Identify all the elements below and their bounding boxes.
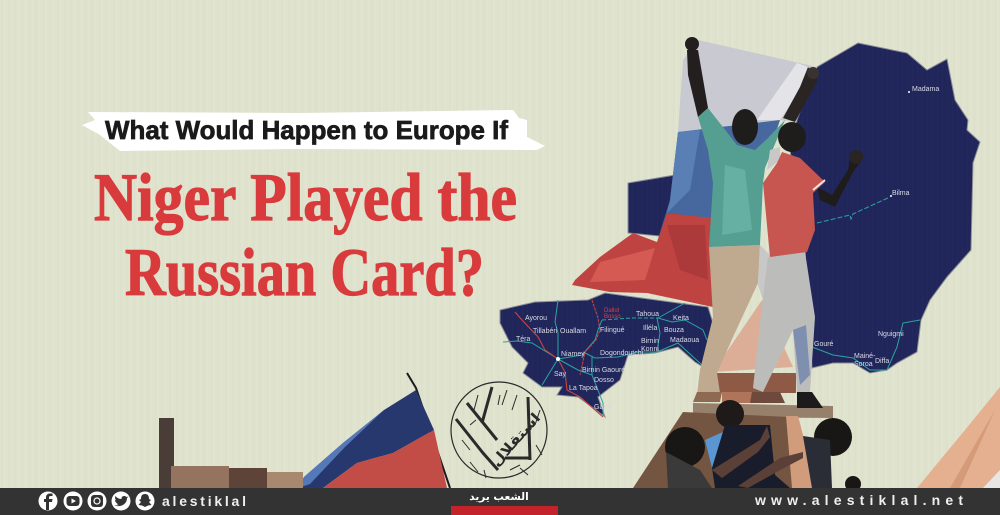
- flag: blue band: [657, 120, 780, 242]
- title: [94, 159, 517, 310]
- title: Russian Card?: [125, 234, 484, 310]
- white brush stroke behind subtitle: [82, 110, 545, 151]
- subtitle: What Would Happen to Europe If: [105, 115, 508, 145]
- flag: red band: [572, 213, 713, 307]
- map: place labels: Dogondoutchi: [600, 350, 644, 357]
- crowd: person left: [665, 427, 705, 467]
- map: western Niger: [500, 293, 713, 417]
- man: head: [732, 109, 758, 145]
- bottom flag: blue band: [298, 390, 434, 488]
- man: shoe: [693, 392, 722, 402]
- man: pale gaps between the men: [758, 147, 780, 300]
- map: place labels: Gouré: [814, 341, 834, 348]
- map: place labels: Nguigmi: [878, 331, 904, 338]
- icon: facebook: [38, 492, 58, 510]
- pyramid: lower stone: [633, 412, 800, 488]
- map: place labels: Birnin Gaouré: [582, 367, 625, 374]
- peach flag at right edge: [917, 387, 1000, 488]
- man: head: [778, 122, 806, 152]
- man in teal shirt: [685, 37, 819, 402]
- man: shoes: [797, 392, 823, 408]
- man in red shirt: [750, 122, 863, 408]
- man: raised arms: [687, 50, 708, 117]
- footer bar: [0, 488, 1000, 515]
- man: shirt: [698, 108, 785, 247]
- map: roads: [503, 197, 920, 417]
- tricolour flag at bottom: [298, 373, 450, 488]
- map: place labels: Bosso: [604, 314, 621, 320]
- man: arm and fist: [817, 157, 862, 207]
- footer: red block: [451, 506, 558, 515]
- map: place labels: Say: [554, 371, 567, 378]
- logo: Alestiklal calligraphic seal: [451, 382, 547, 478]
- bottom flag: pole: [407, 373, 450, 488]
- map: place labels: Gaya: [594, 404, 611, 411]
- logo: calligraphy: استقلال: [487, 410, 544, 470]
- map: place labels: Soroa: [854, 361, 873, 368]
- pyramid: brick base: [716, 373, 796, 393]
- map: place labels: Konni: [641, 346, 659, 353]
- man: grey trousers: [753, 252, 815, 392]
- bottom flag: red band: [323, 430, 447, 488]
- map of Niger: [500, 43, 980, 417]
- map: place labels: Diffa: [875, 358, 889, 365]
- map: place labels: Dosso: [594, 377, 614, 384]
- map: place labels: Filingué: [600, 327, 625, 334]
- icon: snapchat: [136, 492, 154, 510]
- crowd: person right: [814, 418, 852, 456]
- footer: handle: alestiklal: [162, 493, 246, 509]
- map: place labels: Mainé-: [854, 353, 876, 360]
- pyramid: upper stone: [713, 300, 793, 372]
- map: place labels: Birnin: [641, 338, 659, 345]
- map: place labels: Ouallam: [560, 328, 586, 335]
- map: place labels: [516, 86, 939, 411]
- map: place labels: Dallol: [604, 308, 619, 314]
- footer: Arabic slogan: الشعب يريد: [469, 491, 529, 503]
- map: place labels: Keita: [673, 315, 689, 322]
- flag: white band: [678, 40, 817, 132]
- footer: social icons: [38, 492, 154, 510]
- crowd below the monument: [665, 400, 861, 492]
- map: place labels: Madama: [912, 86, 939, 93]
- map: place labels: Bilma: [892, 190, 910, 197]
- footer: website: www.alestiklal.net: [754, 492, 963, 508]
- title: Niger Played the: [94, 159, 517, 235]
- monument pyramid: [633, 300, 833, 488]
- man: red shirt: [763, 152, 825, 257]
- icon: youtube: [64, 492, 82, 510]
- map: place labels: Madaoua: [670, 337, 699, 344]
- building in the background: [159, 418, 303, 488]
- map: place labels: Illéla: [643, 325, 658, 332]
- map: place labels: Tillabéri: [533, 328, 558, 335]
- Russian flag held up: [572, 40, 817, 307]
- map: eastern Niger: [790, 43, 980, 373]
- man: trousers: [697, 245, 760, 395]
- map: place labels: Téra: [516, 336, 530, 343]
- icon: twitter: [112, 492, 130, 510]
- icon: instagram: [88, 492, 106, 510]
- map: place labels: Tahoua: [636, 311, 659, 318]
- map: place labels: Ayorou: [525, 315, 547, 322]
- map: place labels: La Tapoa: [569, 385, 598, 392]
- map: place labels: Bouza: [664, 327, 684, 334]
- crowd: person in blue: [716, 400, 744, 428]
- map: place labels: Niamey: [561, 351, 585, 358]
- pyramid: ledge: [693, 403, 833, 418]
- map: central Niger behind flag: [628, 175, 700, 240]
